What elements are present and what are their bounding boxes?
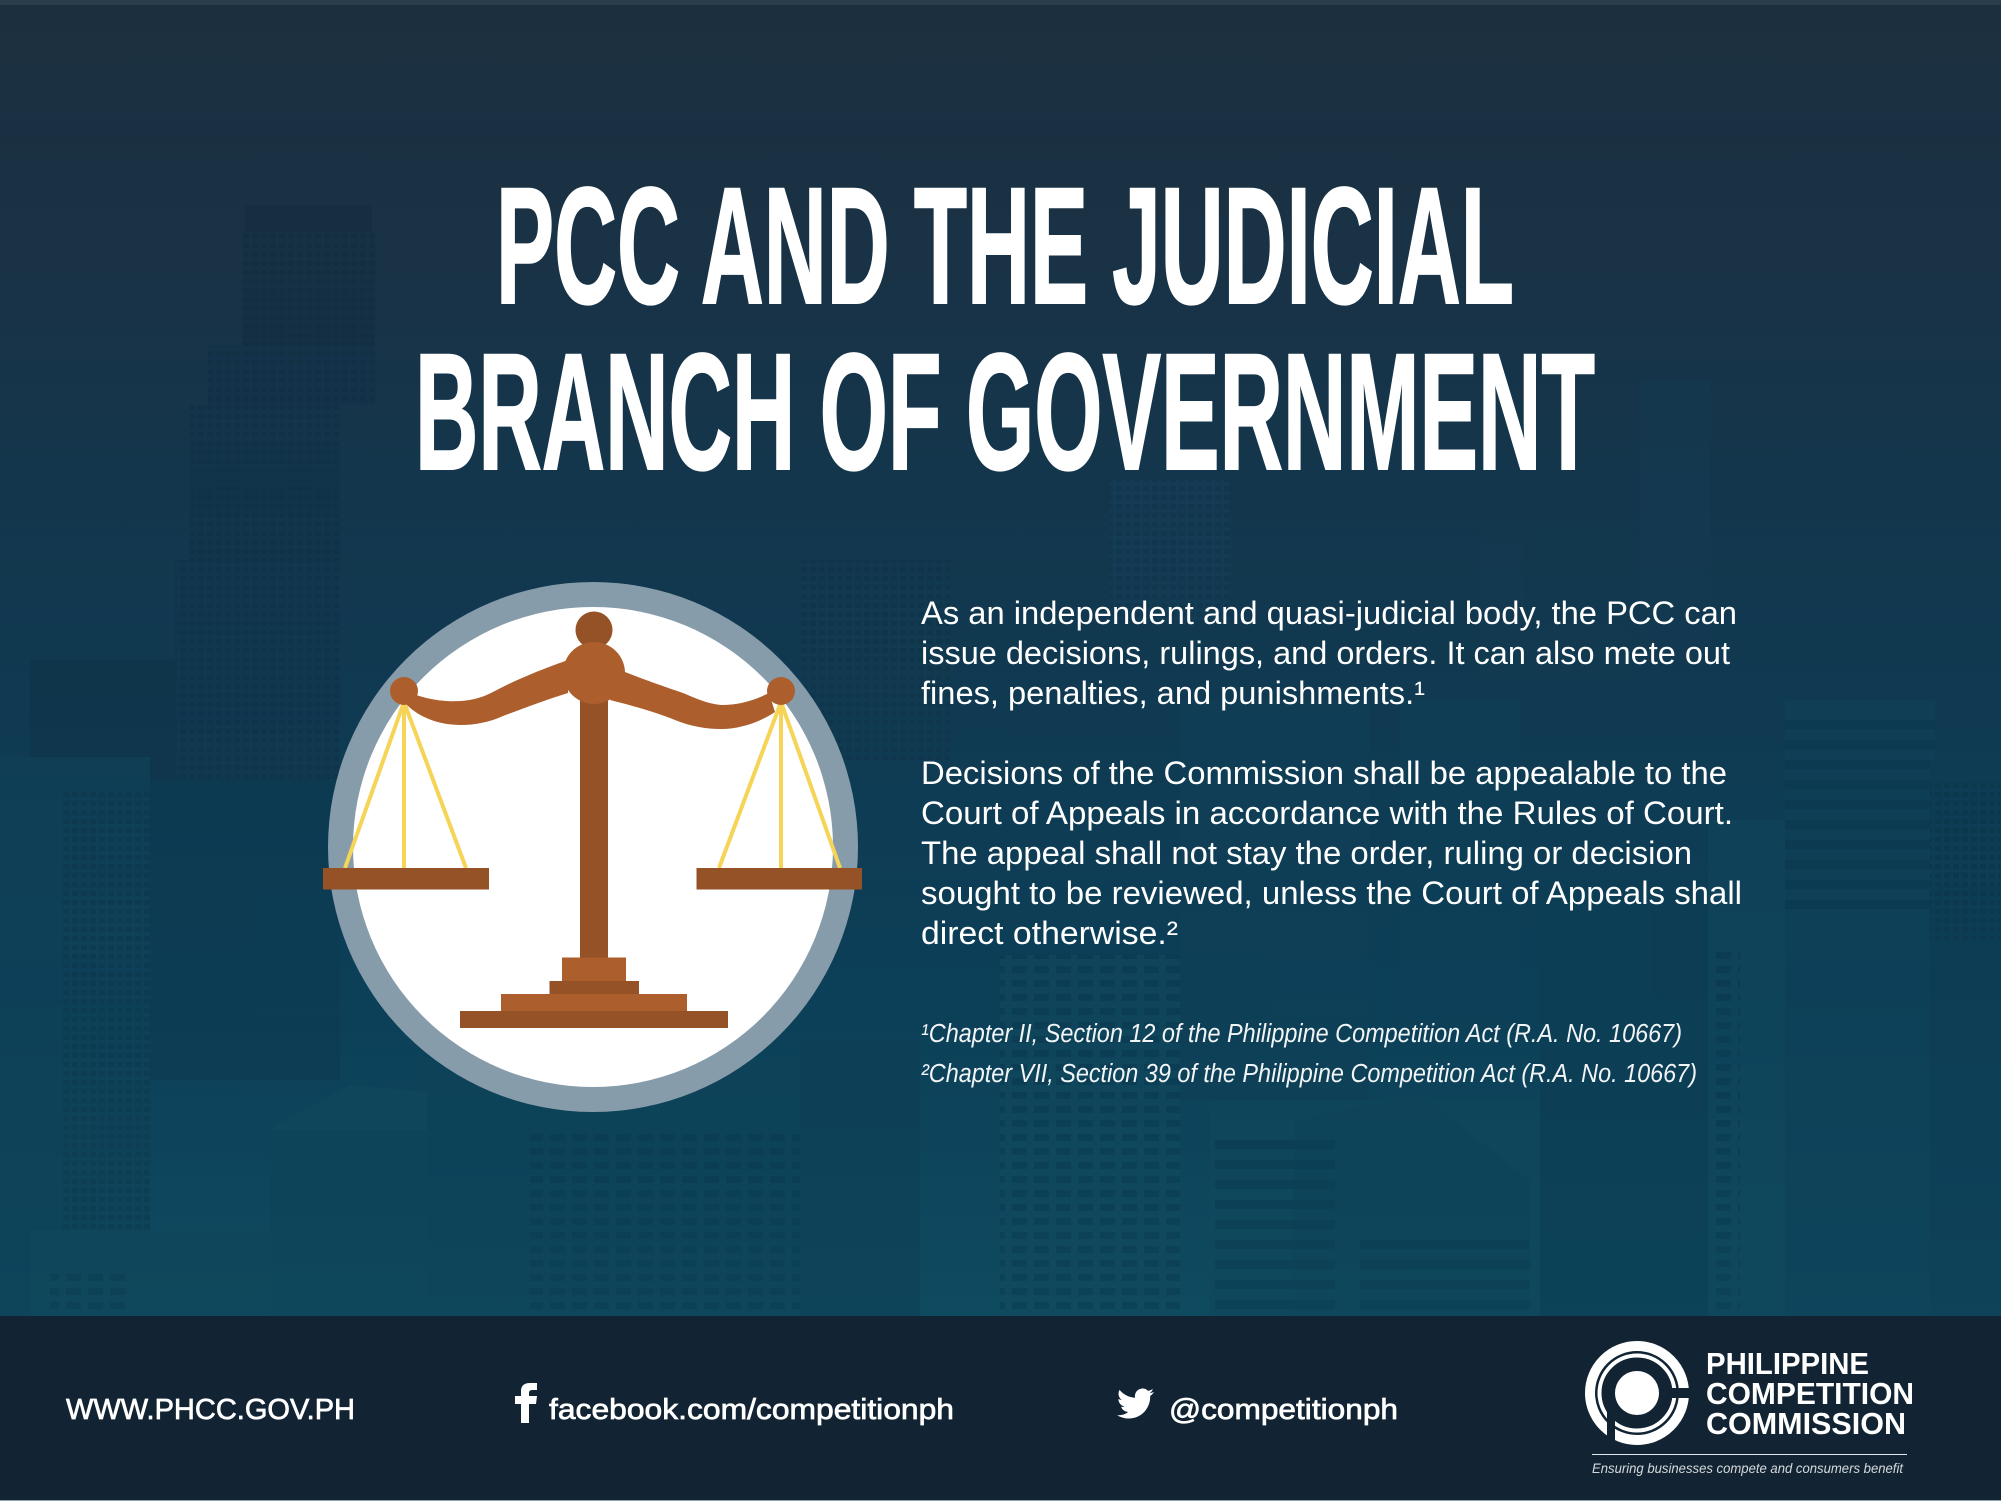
paragraph 1: fines, penalties, and punishments.¹ bbox=[921, 675, 1425, 711]
icon: scales of justice in circle bbox=[323, 582, 862, 1112]
body text bbox=[921, 595, 1742, 951]
paragraph 2: direct otherwise.² bbox=[921, 915, 1178, 951]
right strings bbox=[719, 702, 840, 868]
pole bbox=[580, 690, 608, 960]
logo mark bbox=[1590, 1346, 1692, 1447]
background: city skyline bbox=[0, 205, 2001, 1316]
paragraph 2: sought to be reviewed, unless the Court of Appeals shall bbox=[921, 875, 1742, 911]
title bbox=[415, 154, 1595, 505]
footnotes: ¹Chapter II, Section 12 of the Philippine Competition Act (R.A. No. 10667) bbox=[921, 1020, 1682, 1048]
hub bbox=[563, 642, 625, 704]
logo: Philippine Competition Commission bbox=[1590, 1346, 1914, 1476]
footer band bbox=[0, 1316, 2001, 1501]
icon: twitter bbox=[1117, 1388, 1154, 1418]
right knob bbox=[767, 677, 795, 705]
circle ring bbox=[328, 582, 858, 1112]
right beam arm bbox=[610, 672, 775, 729]
facebook handle: facebook.com/competitionph bbox=[549, 1394, 954, 1426]
right pan bbox=[696, 868, 862, 890]
base steps bbox=[460, 958, 728, 1028]
footnotes bbox=[921, 1020, 1697, 1088]
icon: facebook bbox=[515, 1383, 537, 1423]
footnotes: ²Chapter VII, Section 39 of the Philippine Competition Act (R.A. No. 10667) bbox=[921, 1060, 1697, 1088]
logo wordmark: PHILIPPINE bbox=[1706, 1346, 1869, 1381]
paragraph 2: Decisions of the Commission shall be appealable to the bbox=[921, 755, 1727, 791]
white disc bbox=[353, 607, 833, 1087]
left strings bbox=[345, 702, 466, 868]
logo wordmark: COMPETITION bbox=[1706, 1376, 1914, 1411]
top knob bbox=[576, 612, 612, 648]
logo wordmark bbox=[1706, 1346, 1914, 1441]
paragraph 1: As an independent and quasi-judicial body, the PCC can bbox=[921, 595, 1737, 631]
paragraph 1: issue decisions, rulings, and orders. It can also mete out bbox=[921, 635, 1730, 671]
paragraph 2: Court of Appeals in accordance with the Rules of Court. bbox=[921, 795, 1733, 831]
website link: WWW.PHCC.GOV.PH bbox=[66, 1394, 355, 1426]
twitter handle: @competitionph bbox=[1169, 1394, 1398, 1426]
paragraph 1 bbox=[921, 595, 1737, 711]
left knob bbox=[390, 677, 418, 705]
left beam arm bbox=[404, 660, 568, 725]
left pan bbox=[323, 868, 489, 890]
logo wordmark: COMMISSION bbox=[1706, 1406, 1906, 1441]
paragraph 2: The appeal shall not stay the order, ruling or decision bbox=[921, 835, 1692, 871]
background: top edge strip bbox=[0, 0, 2001, 5]
logo tagline: Ensuring businesses compete and consumers benefit bbox=[1592, 1460, 1904, 1476]
paragraph 2 bbox=[921, 755, 1742, 951]
